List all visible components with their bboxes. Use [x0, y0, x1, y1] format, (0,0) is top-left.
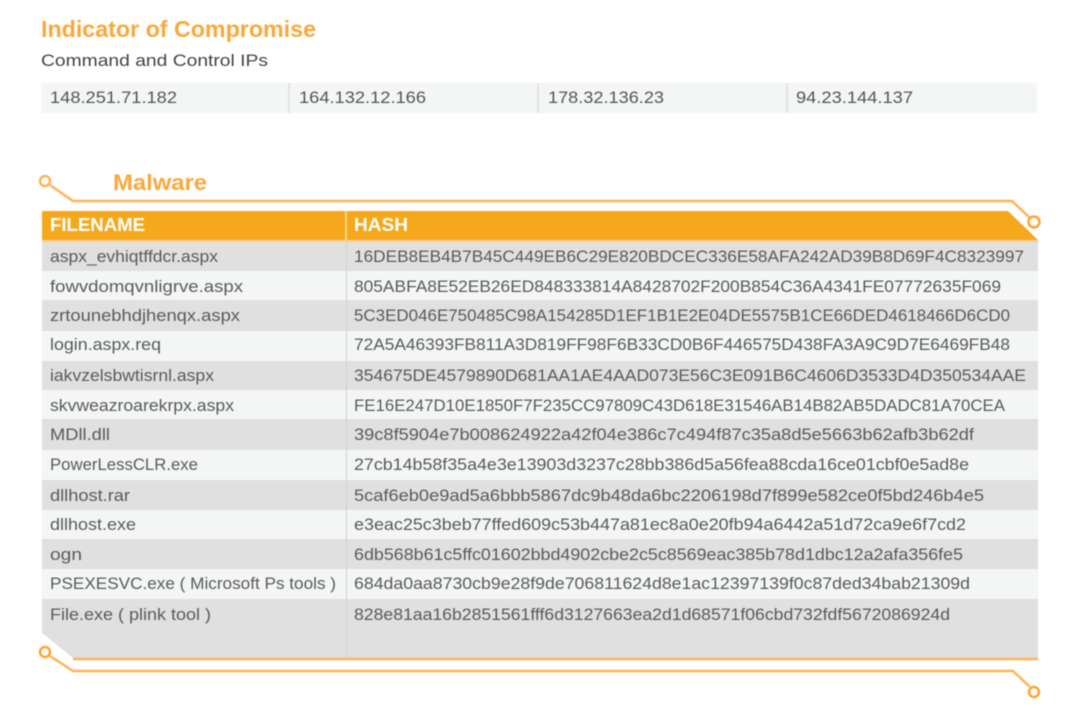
subheading: command and control IPs: Command and Control IPs — [41, 51, 268, 70]
row 7 — [42, 419, 1038, 450]
IP 4: 94.23.144.137 — [796, 88, 913, 107]
row 4 — [42, 331, 1038, 361]
row 1: aspx_evhiqtffdcr.aspx — [50, 247, 219, 266]
IP 2: 164.132.12.166 — [299, 88, 426, 107]
row 12: PSEXESVC.exe ( Microsoft Ps tools ) — [50, 574, 336, 593]
row 13: 828e81aa16b2851561fff6d3127663ea2d1d68571f06cbd732fdf5672086924d — [354, 605, 950, 624]
row 11: 6db568b61c5ffc01602bbd4902cbe2c5c8569eac385b78d1dbc12a2afa356fe5 — [354, 545, 963, 564]
row 5 — [42, 361, 1038, 390]
row 13: File.exe ( plink tool ) — [50, 605, 211, 624]
row 10: e3eac25c3beb77ffed609c53b447a81ec8a0e20fb94a6442a51d72ca9e6f7cd2 — [354, 515, 966, 534]
row 6: FE16E247D10E1850F7F235CC97809C43D618E31546AB14B82AB5DADC81A70CEA — [354, 396, 1006, 415]
row 6: skvweazroarekrpx.aspx — [50, 396, 235, 415]
panel: IP address list — [41, 83, 1037, 113]
row 7: MDll.dll — [50, 425, 110, 444]
row 9 — [42, 480, 1038, 510]
row 1: 16DEB8EB4B7B45C449EB6C29E820BDCEC336E58AFA242AD39B8D69F4C8323997 — [354, 247, 1024, 266]
row 2: fowvdomqvnligrve.aspx — [50, 277, 244, 296]
table header — [42, 211, 1038, 242]
row 3 — [42, 300, 1038, 331]
row 10 — [42, 510, 1038, 539]
row 5: iakvzelsbwtisrnl.aspx — [50, 366, 215, 385]
title: Indicator of Compromise — [41, 16, 316, 42]
row 2 — [42, 271, 1038, 300]
heading: malware: Malware — [113, 170, 207, 195]
row 6 — [42, 390, 1038, 419]
row 8: 27cb14b58f35a4e3e13903d3237c28bb386d5a56fea88cda16ce01cbf0e5ad8e — [354, 455, 969, 474]
row 4: 72A5A46393FB811A3D819FF98F6B33CD0B6F446575D438FA3A9C9D7E6469FB48 — [354, 335, 1010, 354]
IP 1: 148.251.71.182 — [50, 88, 177, 107]
row 9: dllhost.rar — [50, 486, 130, 505]
malware table — [42, 211, 1038, 658]
row 12: 684da0aa8730cb9e28f9de706811624d8e1ac12397139f0c87ded34bab21309d — [354, 574, 970, 593]
row 3: 5C3ED046E750485C98A154285D1EF1B1E2E04DE5575B1CE66DED4618466D6CD0 — [354, 306, 1010, 325]
circuit line: top frame — [40, 176, 1040, 228]
row 1 — [42, 242, 1038, 271]
IP 3: 178.32.136.23 — [548, 88, 664, 107]
row 8: PowerLessCLR.exe — [50, 455, 198, 474]
row 4: login.aspx.req — [50, 335, 161, 354]
circuit line: bottom frame — [40, 647, 1039, 697]
row 11: ogn — [50, 545, 82, 564]
row 13 — [42, 599, 1038, 658]
row 2: 805ABFA8E52EB26ED848333814A8428702F200B854C36A4341FE07772635F069 — [354, 277, 1001, 296]
column: filename: FILENAME — [50, 215, 145, 235]
column: hash: HASH — [354, 215, 408, 235]
row 12 — [42, 569, 1038, 599]
row 11 — [42, 539, 1038, 569]
row 8 — [42, 450, 1038, 480]
row 5: 354675DE4579890D681AA1AE4AAD073E56C3E091B6C4606D3533D4D350534AAE — [354, 366, 1026, 385]
row 10: dllhost.exe — [50, 515, 136, 534]
row 3: zrtounebhdjhenqx.aspx — [50, 306, 241, 325]
row 7: 39c8f5904e7b008624922a42f04e386c7c494f87c35a8d5e5663b62afb3b62df — [354, 425, 974, 444]
row 9: 5caf6eb0e9ad5a6bbb5867dc9b48da6bc2206198d7f899e582ce0f5bd246b4e5 — [354, 486, 984, 505]
